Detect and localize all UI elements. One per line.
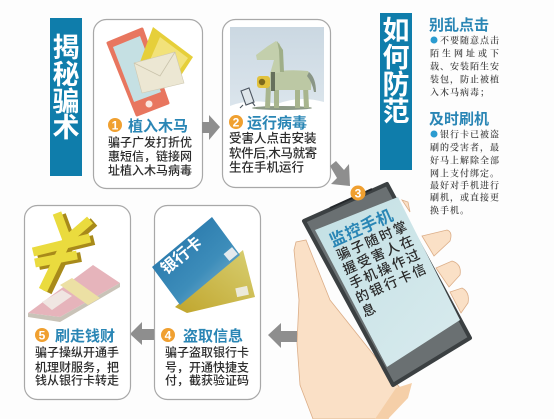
card label: 银行卡 bbox=[157, 233, 206, 278]
tip body bbox=[430, 34, 502, 98]
step description: 号，开通快捷支 bbox=[165, 360, 249, 374]
step description: 付，截获验证码 bbox=[165, 372, 249, 388]
tip body: 刷的受害者，最 bbox=[430, 142, 500, 154]
tip body bbox=[430, 128, 500, 216]
tip body: 最好对手机进行 bbox=[430, 180, 500, 190]
tip body: 银行卡已被盗 bbox=[440, 128, 500, 140]
step description: 骗子广发打折优 bbox=[108, 134, 192, 150]
step description: 软件后,木马就寄 bbox=[229, 146, 317, 160]
step title: 植入木马 bbox=[128, 117, 188, 135]
screen description: 骗子随时掌 bbox=[334, 218, 411, 263]
banner: 揭秘骗术 bbox=[50, 18, 82, 176]
tip body: 刷机，或直接更 bbox=[430, 192, 500, 204]
illustration: trojan horse bbox=[230, 27, 324, 110]
banner: 揭秘骗术: 术 bbox=[52, 113, 80, 143]
tip body: 装包，防止被植 bbox=[430, 74, 500, 86]
banner: 如何防范 bbox=[380, 13, 412, 170]
tip body: 载、安装陌生安 bbox=[430, 60, 500, 72]
phone screen bbox=[315, 197, 460, 367]
step number 5: 5 bbox=[39, 328, 46, 342]
step number 2 bbox=[229, 115, 243, 130]
step number 3: 3 bbox=[355, 186, 362, 200]
screen text, rotated bbox=[326, 201, 436, 320]
arrow: step 1 to step 2 bbox=[202, 115, 220, 140]
step title: 盗取信息 bbox=[183, 327, 243, 345]
tips column: 及时刷机 bbox=[429, 111, 500, 216]
step description bbox=[165, 344, 249, 388]
illustration: hand holding phone bbox=[294, 184, 470, 419]
screen description: 手机操作过 bbox=[347, 245, 424, 291]
tip heading: 及时刷机 bbox=[429, 111, 489, 128]
banner: 揭秘骗术: 骗 bbox=[52, 87, 80, 117]
horse legs bbox=[265, 86, 309, 108]
step description bbox=[229, 130, 317, 174]
banner: 如何防范: 如 bbox=[382, 16, 410, 46]
step number 2: 2 bbox=[233, 116, 240, 130]
illustration: bank cards bbox=[152, 217, 255, 313]
tip body: 换手机。 bbox=[430, 204, 470, 216]
icon: phone with envelopes bbox=[108, 27, 193, 115]
step title: 运行病毒 bbox=[247, 114, 307, 132]
tip body: 网上支付绑定。 bbox=[430, 168, 500, 178]
fingers bbox=[402, 200, 468, 313]
step description: 惠短信，链接网 bbox=[108, 148, 192, 164]
phone body bbox=[304, 184, 470, 385]
tip body: 入木马病毒； bbox=[430, 86, 490, 98]
tip body: 不要随意点击 bbox=[440, 34, 500, 46]
step description: 骗子盗取银行卡 bbox=[165, 344, 249, 360]
step description bbox=[108, 134, 192, 178]
step description: 生在手机运行 bbox=[229, 160, 304, 174]
screen description: 的银行卡信 bbox=[353, 260, 430, 306]
screen description: 握受害人在 bbox=[340, 231, 418, 277]
step description bbox=[35, 344, 119, 388]
hand bbox=[294, 240, 400, 419]
panel 5: 刷走钱财 bbox=[24, 206, 130, 400]
banner: 如何防范: 何 bbox=[382, 43, 410, 73]
banner: 如何防范: 防 bbox=[382, 70, 410, 100]
step description: 钱从银行卡转走 bbox=[35, 372, 119, 388]
illustration: yuan symbol and money bbox=[28, 213, 120, 322]
arrow: step 2 to step 3 bbox=[330, 161, 350, 186]
panel 1: 植入木马 bbox=[94, 20, 202, 188]
step description: 骗子操纵开通手 bbox=[35, 344, 119, 360]
step title: 刷走钱财 bbox=[55, 327, 115, 345]
step number 4 bbox=[161, 328, 175, 342]
horse body bbox=[270, 70, 311, 90]
banner: 揭秘骗术: 秘 bbox=[52, 60, 80, 90]
tip body: 陌生网址或下 bbox=[430, 48, 502, 58]
step number 5 bbox=[35, 328, 49, 342]
arrow: step 3 to step 4 bbox=[268, 323, 297, 348]
step description: 址植入木马病毒 bbox=[108, 162, 192, 178]
screen description bbox=[334, 218, 436, 320]
step number 1 bbox=[108, 118, 122, 132]
panel 2: 运行病毒 bbox=[222, 20, 330, 188]
step number 3 bbox=[350, 186, 366, 200]
screen description: 息 bbox=[359, 299, 380, 320]
panel 4: 盗取信息 bbox=[152, 206, 260, 400]
tip body: 好马上解除全部 bbox=[430, 154, 500, 166]
phone speaker bbox=[330, 189, 372, 208]
step description: 机理财服务，把 bbox=[35, 360, 119, 374]
tips column: 别乱点击 bbox=[429, 16, 502, 98]
tip heading: 别乱点击 bbox=[429, 16, 489, 34]
horse neck and head bbox=[256, 41, 283, 74]
banner: 如何防范: 范 bbox=[382, 97, 410, 127]
banner: 揭秘骗术: 揭 bbox=[52, 33, 80, 63]
arrow: step 4 to step 5 bbox=[130, 322, 154, 345]
step number 1: 1 bbox=[112, 118, 119, 132]
step number 4: 4 bbox=[165, 328, 172, 342]
step description: 受害人点击安装 bbox=[229, 130, 317, 146]
screen heading: 监控手机 bbox=[326, 205, 396, 251]
